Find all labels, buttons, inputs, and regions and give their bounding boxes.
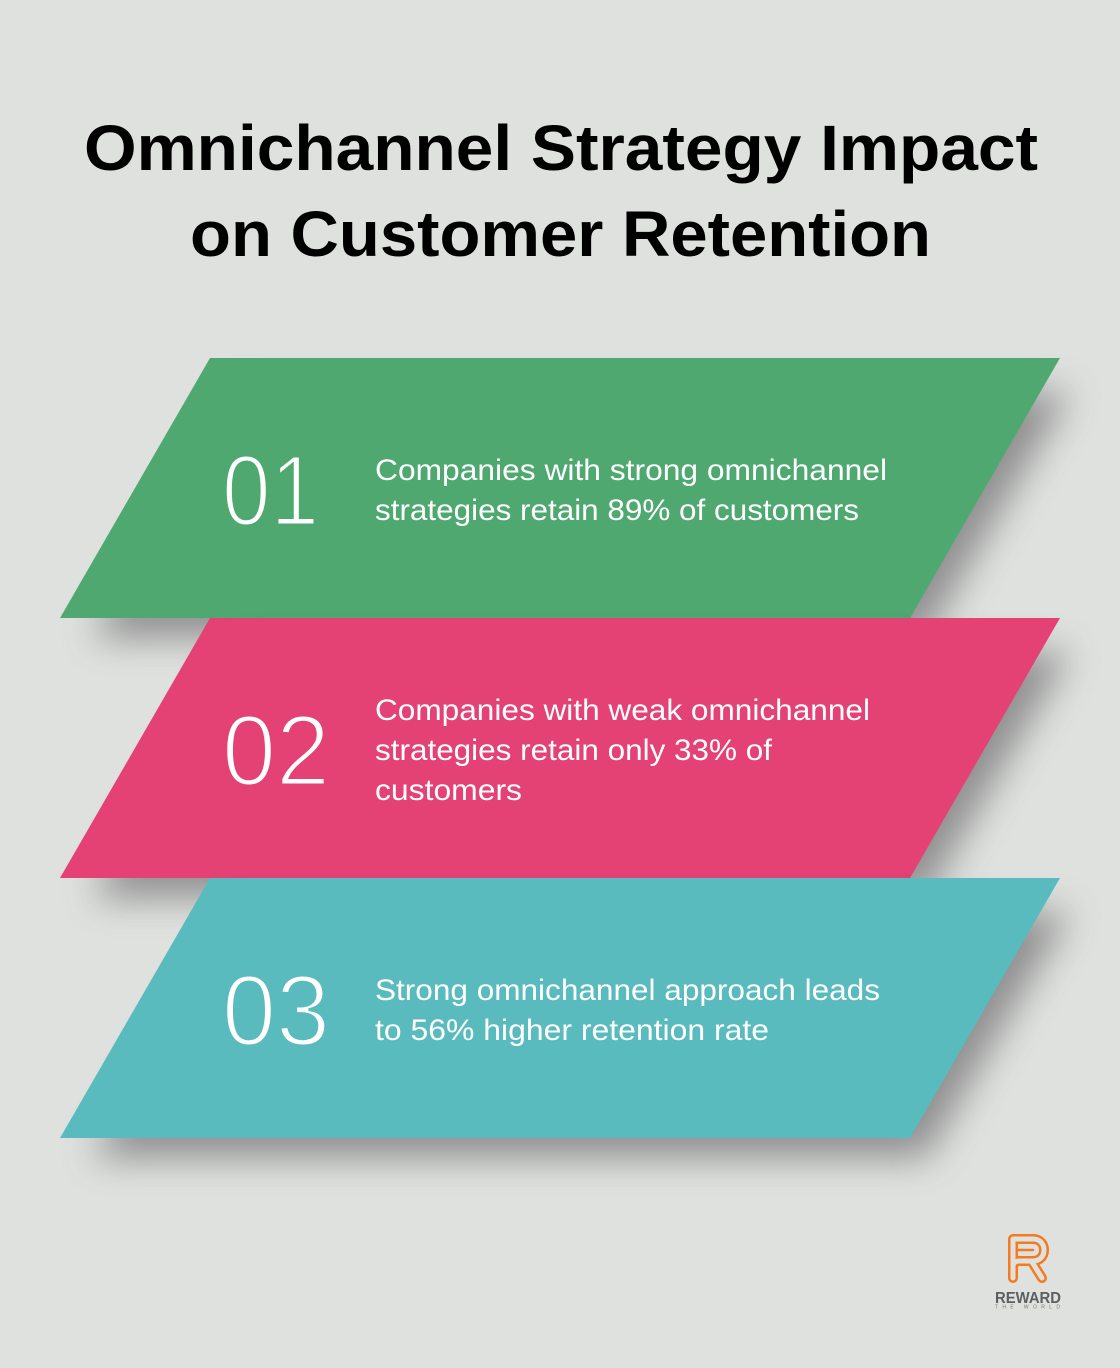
text: step 03: Strong omnichannel approach leads — [375, 974, 880, 1007]
text: step 02: Companies with weak omnichannel — [375, 694, 870, 727]
title: Omnichannel Strategy Impact — [84, 112, 1038, 184]
panel: step 02 — [60, 618, 1070, 898]
tagline: THE WORLD — [995, 1304, 1060, 1310]
logo: Reward the World — [995, 1239, 1061, 1310]
title — [84, 112, 1038, 270]
number 03: 03 — [222, 955, 330, 1067]
panel: step 03 — [60, 878, 1070, 1158]
wordmark: REWARD — [995, 1290, 1061, 1307]
text: step 01 — [375, 454, 887, 527]
title: on Customer Retention — [190, 198, 931, 270]
text: step 03: to 56% higher retention rate — [375, 1014, 769, 1047]
text: step 02 — [375, 694, 870, 807]
text: step 01: strategies retain 89% of customers — [375, 494, 859, 527]
number 02: 02 — [222, 695, 330, 807]
text: step 02: strategies retain only 33% of — [375, 734, 773, 767]
text: step 02: customers — [375, 774, 522, 807]
number 01: 01 — [222, 435, 319, 547]
text: step 01: Companies with strong omnichannel — [375, 454, 887, 487]
icon: R mark — [1013, 1239, 1044, 1278]
panel: step 01 — [60, 358, 1070, 638]
text: step 03 — [375, 974, 880, 1047]
